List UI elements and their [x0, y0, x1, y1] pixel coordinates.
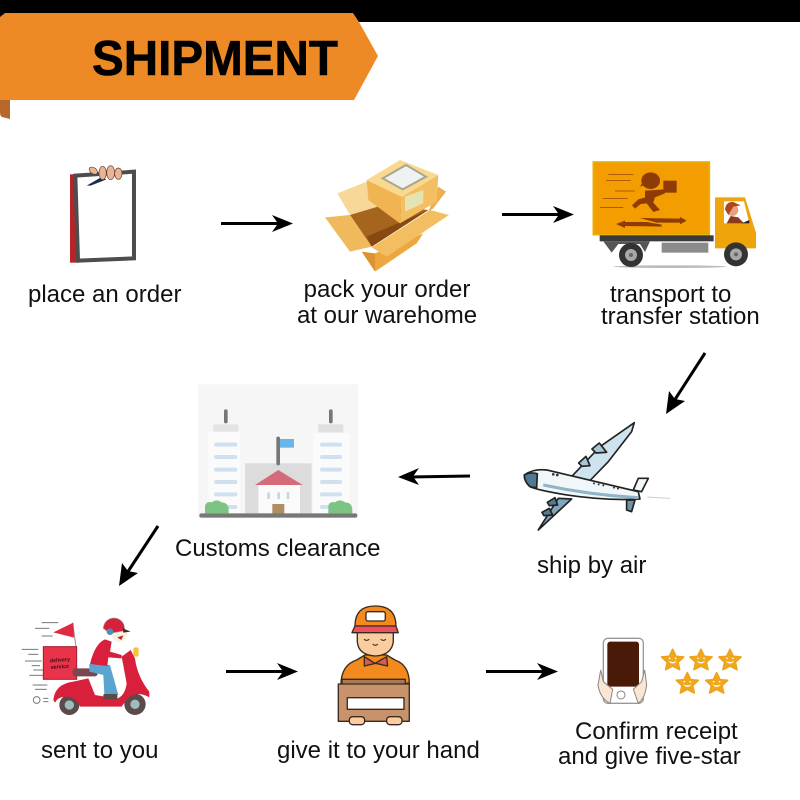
icon: open cardboard box	[325, 160, 449, 272]
step 2: pack your order	[297, 160, 477, 329]
step 5: customs clearance	[175, 384, 380, 562]
label: ship by air	[537, 552, 646, 579]
arrow	[502, 206, 574, 223]
arrow	[119, 526, 158, 586]
icon: delivery truck	[593, 162, 756, 268]
icon: phone in hands	[598, 638, 647, 703]
icon: customs building	[198, 384, 358, 518]
step 4: ship by air	[524, 423, 670, 579]
icon: delivery scooter	[22, 618, 149, 715]
label: place an order	[28, 281, 181, 308]
arrow	[226, 663, 298, 680]
step 8: confirm receipt: and give five-star	[558, 743, 741, 770]
step 3: transport to transfer station: transfer station	[601, 303, 760, 330]
title: SHIPMENT	[92, 32, 338, 86]
label: transport to	[610, 281, 731, 308]
label: Customs clearance	[175, 535, 380, 562]
icon: courier holding parcel	[338, 606, 409, 725]
icon: delivery scooter: service	[51, 664, 69, 671]
icon: airplane	[524, 423, 670, 530]
step 1: place an order	[28, 166, 181, 308]
step 3: transport to transfer station	[593, 162, 760, 330]
arrow	[398, 468, 470, 485]
header banner	[0, 13, 378, 119]
label: sent to you	[41, 737, 158, 764]
arrow	[221, 215, 293, 232]
step 6: sent to you	[22, 618, 158, 764]
step 8: confirm receipt	[558, 638, 741, 770]
arrow	[486, 663, 558, 680]
icon: five smiling stars	[662, 649, 741, 693]
label: give it to your hand	[277, 737, 480, 764]
step 2: pack your order: at our warehome	[297, 302, 477, 329]
step 7: give it to your hand	[277, 606, 480, 764]
label: Confirm receipt	[575, 718, 738, 745]
label: pack your order	[304, 276, 470, 303]
arrow	[666, 353, 705, 414]
icon: delivery scooter: delivery	[50, 657, 70, 664]
icon: clipboard with hand	[70, 166, 134, 263]
